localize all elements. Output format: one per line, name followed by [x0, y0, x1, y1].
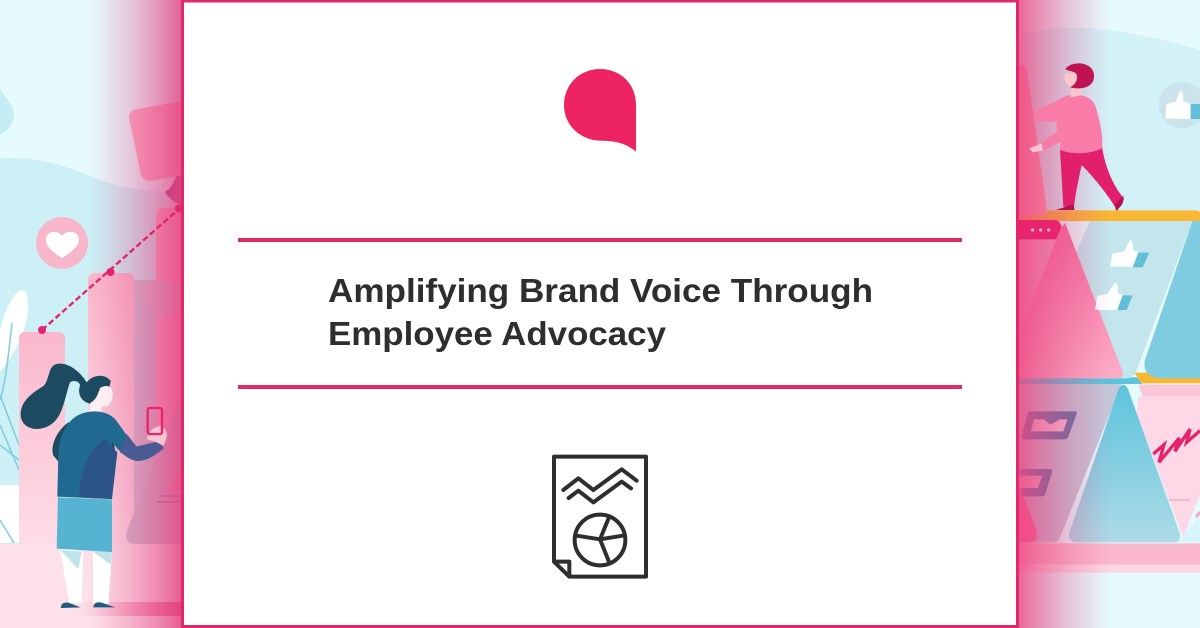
upper card row	[1017, 65, 1200, 378]
zigzag chart line	[1153, 429, 1200, 462]
hair	[21, 364, 111, 429]
left pink fade	[88, 0, 184, 628]
sky hill	[1017, 28, 1200, 213]
legs	[60, 547, 112, 604]
icon: envelope one	[1021, 411, 1077, 439]
right illustration: social cards	[1017, 28, 1200, 573]
sweater	[57, 411, 164, 499]
floor	[0, 544, 182, 628]
hill	[0, 158, 182, 628]
skirt	[57, 497, 112, 552]
title: Employee Advocacy	[328, 315, 667, 352]
icon: heart badge	[36, 217, 88, 269]
coral card behind figure	[1017, 65, 1047, 215]
plant leaves	[0, 290, 28, 372]
woman with phone	[21, 364, 167, 608]
top divider	[238, 238, 962, 242]
grey triangle card	[126, 395, 182, 544]
pink triangle card	[1017, 223, 1123, 378]
floor band	[1017, 543, 1200, 565]
shoes	[1056, 196, 1124, 211]
blob	[0, 88, 14, 135]
icon: thumbs up two	[1095, 283, 1133, 310]
bell	[165, 176, 184, 205]
icon: envelope two	[1020, 469, 1052, 496]
hand	[1029, 143, 1043, 152]
chart bars	[19, 208, 186, 544]
trend line	[38, 204, 183, 334]
lilac column	[134, 280, 158, 544]
back sleeve	[52, 422, 117, 463]
title	[328, 272, 873, 352]
small pink triangle	[1017, 481, 1037, 542]
icon: thumbs up badge	[1159, 82, 1200, 128]
logo: speech drop	[564, 69, 636, 152]
grey card	[1017, 384, 1122, 542]
icon: thumbs up one	[1110, 240, 1149, 267]
browser bar	[1017, 220, 1062, 239]
floor shadow	[75, 602, 182, 616]
icon: report document with charts	[554, 457, 646, 577]
blue card	[1144, 221, 1200, 378]
pants	[1060, 147, 1124, 211]
lower card row	[1017, 373, 1200, 573]
phone	[148, 408, 162, 434]
bottom divider	[238, 385, 962, 389]
hand	[147, 426, 167, 446]
left illustration: analytics scene backdrop	[0, 88, 186, 628]
pale blue card	[1070, 221, 1193, 378]
tilted pink card	[129, 101, 182, 181]
face	[89, 386, 113, 412]
central white panel	[182, 1, 1018, 626]
backing panel	[1017, 238, 1057, 339]
title: Amplifying Brand Voice Through	[328, 272, 873, 309]
yellow shelf	[1017, 210, 1200, 221]
hair	[1065, 63, 1094, 88]
pale pink page	[1137, 397, 1200, 537]
shelf bands	[1017, 377, 1142, 384]
blue triangle card	[1069, 385, 1180, 542]
sweater	[1035, 95, 1102, 153]
face	[1064, 73, 1082, 97]
right pink fade	[1016, 0, 1112, 628]
standing figure	[1029, 63, 1124, 211]
shoes	[61, 602, 115, 608]
